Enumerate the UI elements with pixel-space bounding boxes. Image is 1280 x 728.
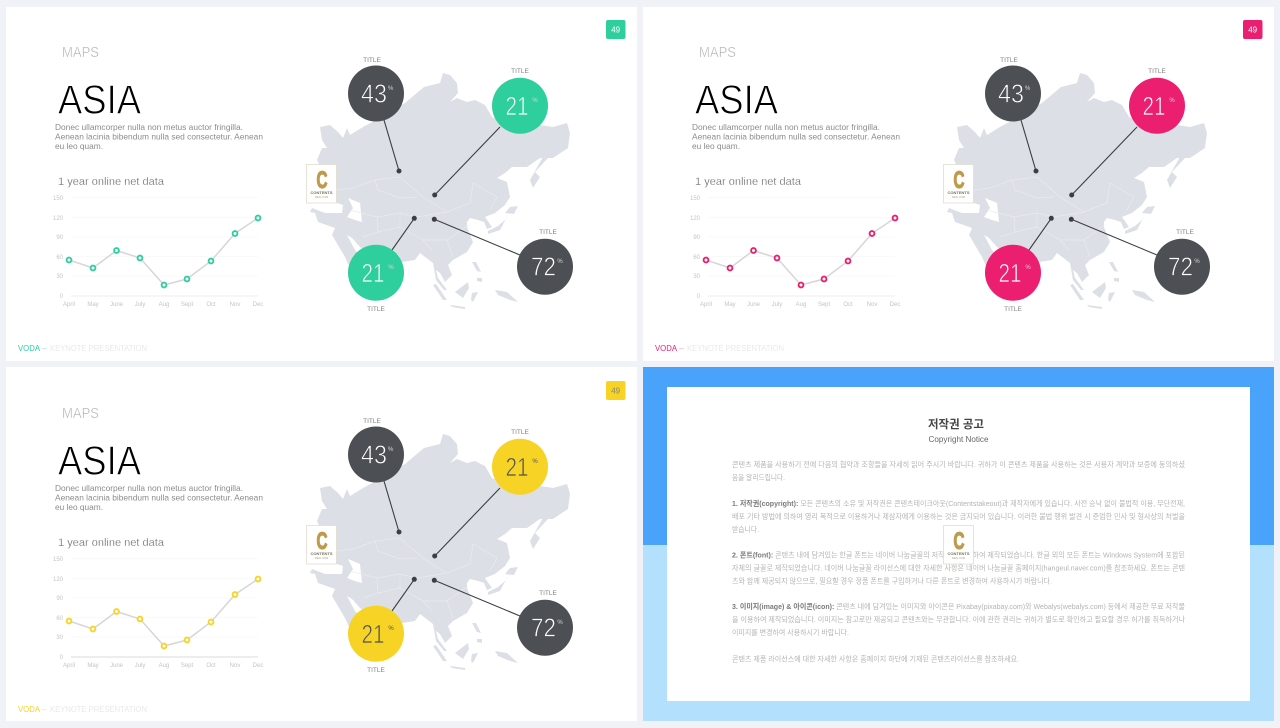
line chart: May — [87, 302, 99, 308]
text block: description: Aenean lacinia bibendum nulla sed consectetur. Aenean — [55, 492, 263, 502]
text block: clause 3: 이미지를 변경하여 사용하시기 바랍니다. — [732, 627, 849, 637]
callout: 21 percent top — [492, 429, 548, 495]
text block: description — [55, 122, 263, 151]
page badge — [606, 381, 626, 400]
callout: 72 percent — [517, 229, 573, 295]
callout: 21 percent bottom: 21 — [362, 619, 384, 649]
footer: VODA — [655, 343, 677, 353]
callout: 21 percent top: TITLE — [1148, 68, 1167, 75]
logo watermark — [944, 526, 974, 564]
callout: 21 percent bottom: 21 — [998, 258, 1022, 288]
callout: 72 percent: 72 — [531, 252, 556, 282]
text block: clause 3: 3. 이미지(image) & 아이콘(icon): 콘텐츠 내에 담겨있는 이미지와 아이콘은 Pixabay(pixabay.com)와 Webalys(webalys.com) 등에서 제공한 무료 저작물 — [732, 601, 1185, 611]
leader lines and markers — [384, 481, 520, 616]
footer: – — [679, 343, 684, 353]
text block: description: Aenean lacinia bibendum nulla sed consectetur. Aenean — [692, 132, 900, 142]
footer — [18, 343, 147, 353]
footer — [655, 343, 784, 353]
callout: 21 percent bottom: % — [1025, 265, 1031, 271]
callout: 21 percent top: 21 — [1142, 91, 1166, 121]
page badge: 49 — [611, 386, 621, 396]
callout: 43 percent: % — [388, 447, 394, 453]
line chart — [53, 196, 263, 308]
text block: clause 1: 배포 기타 방법에 의하여 영리 목적으로 이용하거나 제삼자에게 이용하는 것은 금지되어 있습니다. 이러한 불법 행위 발견 시 준엄한 민사 및 형사상의 처벌을 — [732, 511, 1185, 521]
text block: description: Aenean lacinia bibendum nulla sed consectetur. Aenean — [55, 132, 263, 142]
callout: 21 percent bottom: TITLE — [1004, 306, 1023, 313]
callout: 43 percent: % — [388, 86, 394, 92]
line chart: 0 — [697, 294, 701, 300]
callout: 21 percent bottom: % — [388, 265, 394, 271]
title: Asia: ASIA — [695, 76, 778, 122]
callout: 72 percent: % — [557, 259, 563, 265]
text block: description: Donec ullamcorper nulla non metus auctor fringilla. — [55, 122, 243, 132]
line chart: July — [135, 663, 145, 669]
leader lines and markers — [384, 120, 520, 255]
callout: 43 percent: % — [1025, 86, 1031, 92]
white notice card — [667, 387, 1250, 701]
callout: 21 percent top: TITLE — [511, 68, 530, 75]
footer: – — [42, 704, 47, 714]
line chart: April — [63, 302, 75, 308]
line chart: 150 — [53, 557, 64, 563]
callout: 72 percent: TITLE — [539, 229, 558, 236]
heading: maps: MAPS — [62, 45, 99, 61]
line chart: Nov — [230, 302, 240, 308]
callout: 21 percent bottom: TITLE — [367, 667, 386, 674]
callout: 21 percent top: 21 — [506, 91, 528, 121]
line chart: Aug — [159, 663, 169, 669]
logo watermark — [306, 526, 336, 564]
line chart: April — [700, 302, 712, 308]
line chart: Dec — [253, 663, 263, 669]
callout: 21 percent bottom — [985, 245, 1041, 313]
callout: 72 percent: % — [1194, 259, 1200, 265]
text block: description: Donec ullamcorper nulla non metus auctor fringilla. — [692, 122, 880, 132]
line chart — [53, 557, 263, 669]
line chart: June — [110, 302, 124, 308]
line chart: Nov — [867, 302, 877, 308]
footer: – — [42, 343, 47, 353]
text block: description — [55, 483, 263, 512]
text block: intro: 콘텐츠 제품을 사용하기 전에 다음의 협약과 조항들을 자세히 읽어 주시기 바랍니다. 귀하가 이 콘텐츠 제품을 사용하는 것은 사용자 계약과 보증에 동의하셨 — [732, 459, 1185, 469]
line chart: 30 — [56, 274, 64, 280]
line chart: 60 — [693, 255, 701, 261]
chart title: 1 year online net data — [695, 176, 802, 188]
subheading: copyright notice: Copyright Notice — [928, 434, 989, 444]
line chart: 150 — [690, 196, 701, 202]
callout: 21 percent bottom — [348, 606, 404, 674]
line chart: 0 — [60, 294, 64, 300]
footer: KEYNOTE PRESENTATION — [687, 343, 784, 353]
slide background — [6, 7, 637, 361]
panel: yellow Asia map slide — [6, 367, 637, 721]
callout: 21 percent bottom: % — [388, 626, 394, 632]
map of Asia — [310, 434, 570, 670]
text block: clause 3 — [732, 601, 1185, 637]
line chart: July — [135, 302, 145, 308]
line chart: May — [87, 663, 99, 669]
callout: 21 percent bottom — [348, 245, 404, 313]
heading: copyright notice Korean: 저작권 공고 — [928, 417, 984, 431]
text block: clause 3: 을 이용하여 제작되었습니다. 이미지는 참고로만 제공되고 콘텐츠와는 무관합니다. 이에 관한 권리는 귀하가 별도로 확인하고 필요할 경우 허가를 취득하거나 — [732, 614, 1185, 624]
callout: 72 percent — [1154, 229, 1210, 295]
line chart: Dec — [253, 302, 263, 308]
callout: 21 percent top: TITLE — [511, 429, 530, 436]
callout: 21 percent top: 21 — [506, 452, 528, 482]
logo watermark — [944, 164, 974, 203]
line chart: Oct — [843, 302, 853, 308]
text block: description: eu leo quam. — [55, 502, 103, 512]
line chart: 90 — [693, 235, 701, 241]
text block: description: eu leo quam. — [692, 141, 740, 151]
callout: 43 percent: TITLE — [363, 418, 382, 425]
callout: 72 percent: % — [557, 620, 563, 626]
line chart: Nov — [230, 663, 240, 669]
panel: copyright notice — [643, 367, 1274, 721]
line chart: 120 — [690, 216, 701, 222]
line chart: 60 — [56, 255, 64, 261]
blue background top — [643, 367, 1274, 545]
line chart: Sept — [181, 663, 194, 669]
map of Asia — [947, 73, 1207, 309]
line chart: June — [747, 302, 761, 308]
text block: description: eu leo quam. — [55, 141, 103, 151]
line chart: 90 — [56, 596, 64, 602]
line chart: May — [724, 302, 736, 308]
line chart: 30 — [56, 635, 64, 641]
line chart: Oct — [206, 302, 216, 308]
line chart: Oct — [206, 663, 216, 669]
text block: description — [692, 122, 900, 151]
callout: 21 percent top: % — [1169, 98, 1175, 104]
text block: clause 2: 츠와 함께 제공되지 않으므로, 필요할 경우 정품 폰트를 구입하거나 다른 폰트로 변경하여 사용하시기 바랍니다. — [732, 576, 1052, 586]
text block: clause 1 — [732, 498, 1185, 534]
callout: 72 percent: 72 — [1168, 252, 1193, 282]
line chart: June — [110, 663, 124, 669]
callout: 43 percent — [348, 57, 404, 122]
leader lines and markers — [1021, 120, 1157, 255]
heading: maps: MAPS — [62, 406, 99, 422]
line chart: 150 — [53, 196, 64, 202]
footer: KEYNOTE PRESENTATION — [50, 704, 147, 714]
line chart: 30 — [693, 274, 701, 280]
line chart — [690, 196, 900, 308]
callout: 43 percent — [985, 57, 1041, 122]
line chart: Dec — [890, 302, 900, 308]
text block: closing: 콘텐츠 제품 라이선스에 대한 자세한 사항은 홈페이지 하단에 기재된 콘텐츠라이선스를 참조하세요. — [732, 654, 1019, 664]
line chart: 0 — [60, 655, 64, 661]
callout: 72 percent: TITLE — [539, 590, 558, 597]
map of Asia — [310, 73, 570, 309]
callout: 21 percent top — [492, 68, 548, 134]
callout: 21 percent top — [1129, 68, 1185, 134]
light blue background bottom — [643, 545, 1274, 721]
line chart: Sept — [181, 302, 194, 308]
text block: clause 2 — [732, 550, 1185, 586]
line chart: 120 — [53, 216, 64, 222]
line chart: April — [63, 663, 75, 669]
footer: VODA — [18, 704, 40, 714]
callout: 72 percent: 72 — [531, 612, 556, 642]
chart title: 1 year online net data — [58, 176, 165, 188]
panel: green Asia map slide — [6, 7, 637, 361]
text block: intro: 음을 알리드립니다. — [732, 472, 785, 482]
page badge — [606, 20, 626, 39]
line chart: 60 — [56, 616, 64, 622]
callout: 21 percent top: % — [532, 459, 538, 465]
slide background — [643, 7, 1274, 361]
line chart: Aug — [159, 302, 169, 308]
text block: clause 1: 받습니다. — [732, 524, 759, 534]
callout: 43 percent — [348, 418, 404, 482]
callout: 43 percent: 43 — [998, 78, 1024, 108]
text block: clause 2: 2. 폰트(font): 콘텐츠 내에 담겨있는 한글 폰트는 네이버 나눔글꼴의 저작권을 기증하여 제작되었습니다. 한글 외의 모든 폰트는 Windows System에 포함된 — [732, 550, 1185, 560]
footer: VODA — [18, 343, 40, 353]
footer: KEYNOTE PRESENTATION — [50, 343, 147, 353]
line chart: Sept — [818, 302, 831, 308]
callout: 72 percent — [517, 590, 573, 656]
line chart: 90 — [56, 235, 64, 241]
heading: maps: MAPS — [699, 45, 736, 61]
callout: 72 percent: TITLE — [1176, 229, 1195, 236]
callout: 43 percent: 43 — [361, 78, 387, 108]
text block: intro — [732, 459, 1185, 482]
callout: 43 percent: 43 — [361, 440, 387, 470]
callout: 21 percent bottom: 21 — [362, 258, 384, 288]
line chart: 120 — [53, 577, 64, 583]
panel: pink Asia map slide — [643, 7, 1274, 361]
text block: clause 1: 1. 저작권(copyright): 모든 콘텐츠의 소유 및 저작권은 콘텐츠테이크아웃(Contentstakeout)과 제작자에게 있습니다. 사전 승낙 없이 불법적 이용, 무단전재, — [732, 498, 1185, 508]
line chart: Aug — [796, 302, 806, 308]
line chart: July — [772, 302, 782, 308]
footer — [18, 704, 147, 714]
page badge: 49 — [1248, 26, 1258, 34]
text block: clause 2: 자체의 글꼴로 제작되었습니다. 네이버 나눔글꼴 라이선스에 대한 자세한 사항은 네이버 나눔글꼴 홈페이지(hangeul.naver.com)를 참조하세요. 폰트는 콘텐 — [732, 562, 1185, 572]
slide background — [6, 367, 637, 721]
logo watermark — [306, 164, 336, 203]
callout: 21 percent top: % — [532, 98, 538, 104]
page badge: 49 — [611, 26, 621, 34]
callout: 21 percent bottom: TITLE — [367, 306, 386, 313]
page badge — [1243, 20, 1262, 39]
chart title: 1 year online net data — [58, 537, 165, 549]
callout: 43 percent: TITLE — [363, 57, 382, 64]
title: Asia: ASIA — [58, 438, 141, 484]
callout: 43 percent: TITLE — [1000, 57, 1019, 64]
title: Asia: ASIA — [58, 76, 141, 122]
text block: description: Donec ullamcorper nulla non metus auctor fringilla. — [55, 483, 243, 493]
